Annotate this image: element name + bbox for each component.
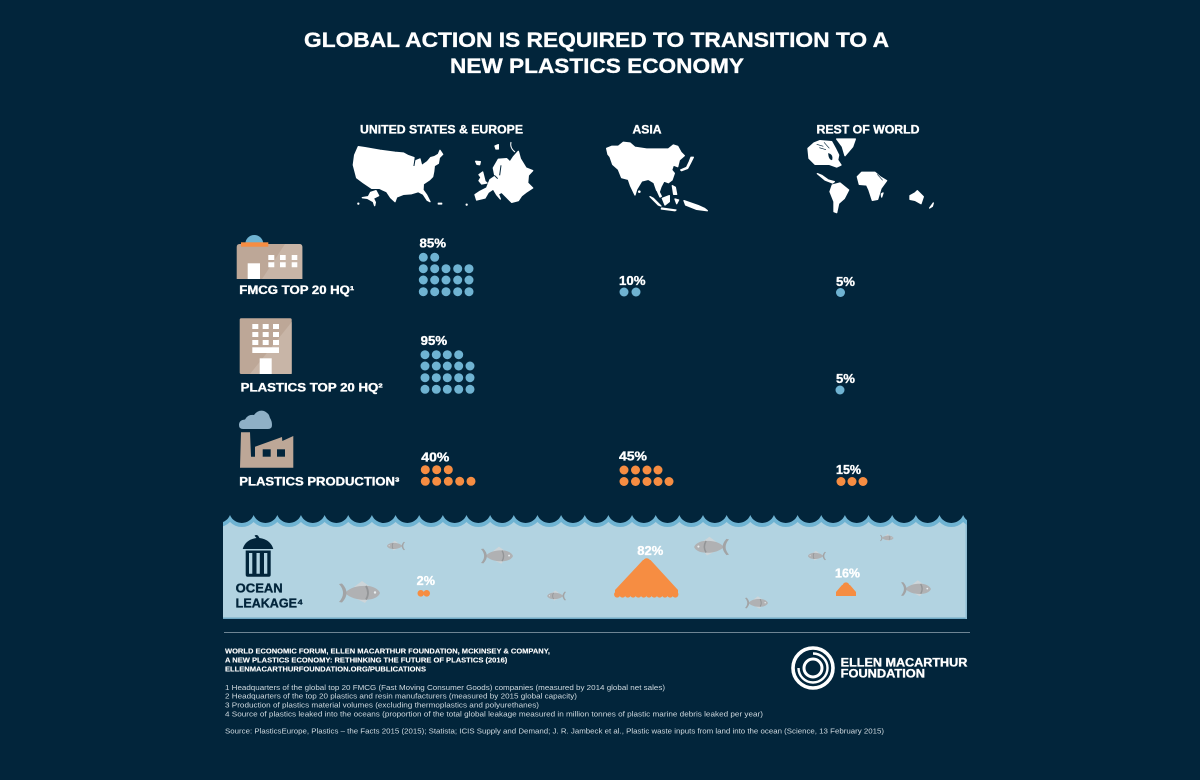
- footnotes: 4 Source of plastics leaked into the oceans (proportion of the total global leakage measured in million tonnes of plastic marine debris leaked per year): [225, 709, 763, 718]
- logo: Ellen MacArthur Foundation: FOUNDATION: [841, 667, 925, 681]
- row 1: Asia 10%: 10%: [619, 274, 646, 288]
- footnotes: 2 Headquarters of the top 20 plastics and resin manufacturers (measured by 2015 global capacity): [225, 692, 577, 701]
- row 3: rest of world 15%: 15%: [836, 463, 861, 477]
- source line: Source: PlasticsEurope, Plastics – the Facts 2015 (2015); Statista; ICIS Supply and Demand; J. R. Jambeck et al., Plastic waste inputs from land into the ocean (Science, 13 February 2015): [225, 727, 884, 736]
- title: [304, 29, 889, 78]
- icon: fish: [481, 547, 513, 564]
- row 2: rest of world 5%: 5%: [836, 372, 855, 386]
- label: FMCG top 20 HQ: FMCG TOP 20 HQ¹: [239, 285, 354, 297]
- label: ocean leakage: OCEAN: [236, 581, 283, 595]
- row 3: US & Europe 40%: 40%: [421, 450, 449, 464]
- panel: ocean leakage: [223, 515, 967, 619]
- row 1: US & Europe 85%: 85%: [420, 236, 446, 250]
- logo: Ellen MacArthur Foundation: ELLEN MACARTHUR: [841, 656, 968, 670]
- footnotes: [225, 683, 763, 718]
- column heading: Rest of world: REST OF WORLD: [816, 122, 920, 136]
- ocean: rest of world 16% pile: [835, 567, 860, 596]
- publication credit: WORLD ECONOMIC FORUM, ELLEN MACARTHUR FOUNDATION, MCKINSEY & COMPANY,: [225, 647, 550, 656]
- footnotes: 3 Production of plastics material volumes (excluding thermoplastics and polyurethanes): [225, 701, 539, 710]
- row 3: US & Europe 40%: [421, 450, 476, 486]
- label: plastics top 20 HQ: PLASTICS TOP 20 HQ²: [241, 382, 383, 394]
- icon: fish lower: [745, 596, 768, 609]
- ocean: US & Europe 2%: 2%: [417, 574, 435, 588]
- row 3: Asia 45%: 45%: [619, 450, 647, 464]
- map: Asia: [607, 142, 707, 211]
- icon: factory with cloud: [239, 411, 293, 468]
- label: ocean leakage: [236, 581, 303, 610]
- publication credit: ELLENMACARTHURFOUNDATION.ORG/PUBLICATIONS: [225, 664, 426, 673]
- ocean: Asia 82% pile: [614, 544, 678, 598]
- map: rest of world: [808, 139, 933, 213]
- icon: trash can: [243, 535, 273, 577]
- footer divider: [224, 632, 970, 633]
- row 1: rest of world 5%: [836, 275, 855, 297]
- title: GLOBAL ACTION IS REQUIRED TO TRANSITION TO A: [304, 29, 889, 52]
- footnotes: 1 Headquarters of the global top 20 FMCG (Fast Moving Consumer Goods) companies (measured by 2014 global net sales): [225, 683, 665, 692]
- icon: fish right: [901, 580, 931, 596]
- column heading: Asia: ASIA: [632, 122, 662, 136]
- column heading: United States & Europe: UNITED STATES & EUROPE: [360, 122, 523, 136]
- icon: small fish: [387, 541, 405, 550]
- label: plastics production: PLASTICS PRODUCTION³: [239, 477, 399, 489]
- row 2: US & Europe 95%: 95%: [421, 334, 447, 348]
- row 2: rest of world 5%: [836, 372, 855, 394]
- icon: plastics headquarters building: [240, 318, 292, 374]
- row 1: rest of world 5%: 5%: [836, 275, 855, 289]
- ocean: US & Europe 2%: [417, 574, 435, 597]
- row 3: rest of world 15%: [836, 463, 868, 486]
- publication credit: [225, 647, 550, 673]
- icon: FMCG headquarters building: [237, 235, 302, 279]
- row 3: Asia 45%: [619, 450, 674, 486]
- ocean: rest of world 16% pile: 16%: [835, 567, 860, 581]
- logo: Ellen MacArthur Foundation: [793, 648, 968, 688]
- title: NEW PLASTICS ECONOMY: [450, 55, 744, 78]
- icon: small fish centre: [547, 590, 566, 601]
- ocean: Asia 82% pile: 82%: [637, 544, 663, 558]
- row 1: Asia 10%: [619, 274, 646, 296]
- map: Europe: [466, 142, 533, 205]
- row 1: US & Europe 85%: [419, 236, 474, 296]
- label: ocean leakage: LEAKAGE⁴: [236, 596, 303, 610]
- publication credit: A NEW PLASTICS ECONOMY: RETHINKING THE FUTURE OF PLASTICS (2016): [225, 656, 508, 665]
- icon: tiny fish: [880, 534, 894, 541]
- row 2: US & Europe 95%: [420, 334, 474, 394]
- icon: fish large left: [339, 581, 380, 603]
- icon: fish centre: [694, 537, 729, 556]
- icon: small fish right: [808, 551, 826, 560]
- map: United States: [353, 147, 443, 206]
